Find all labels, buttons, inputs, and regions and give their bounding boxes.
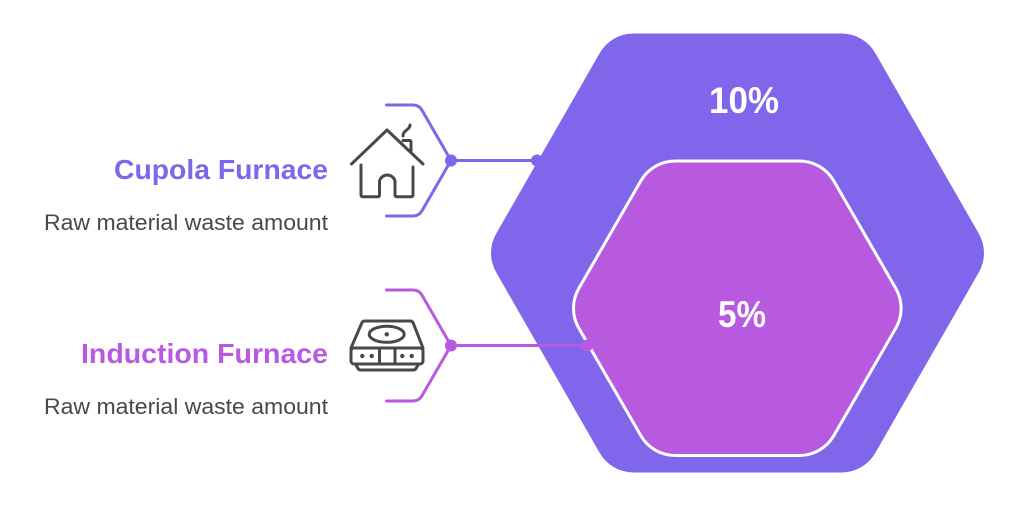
cupola connector line [386, 105, 543, 216]
inner hexagon: induction furnace [573, 161, 901, 456]
value: 10%: 10% [709, 80, 779, 121]
value: 5%: 5% [718, 294, 766, 335]
induction connector line [386, 290, 593, 401]
icon: induction furnace device [351, 321, 423, 370]
text: cupola description: Raw material waste amount [44, 210, 328, 235]
text: induction description: Raw material waste amount [44, 394, 328, 419]
outer hexagon: cupola furnace [491, 34, 984, 472]
icon: house with chimney [352, 125, 423, 197]
heading: Induction Furnace: Induction Furnace [81, 338, 328, 369]
heading: Cupola Furnace: Cupola Furnace [114, 154, 328, 185]
